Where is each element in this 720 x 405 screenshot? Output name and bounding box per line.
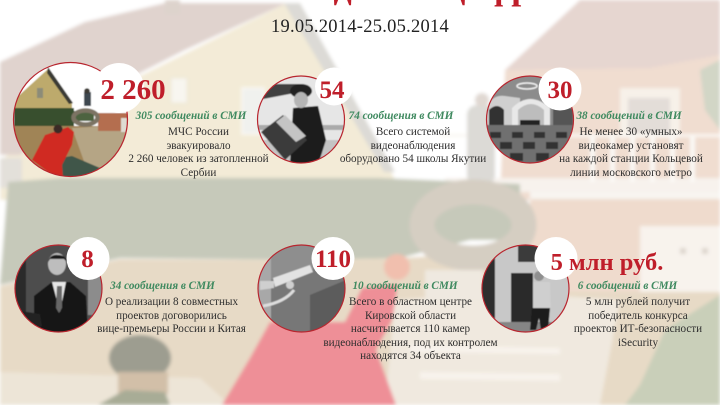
caption: находятся 34 объекта — [360, 350, 461, 362]
lower left wall shade — [0, 158, 22, 188]
left house gable edge — [284, 3, 395, 172]
white crate behind hands — [425, 270, 483, 300]
number badge — [94, 63, 166, 113]
caption: Всего в областном центре — [349, 296, 472, 308]
caption: эвакуировало — [166, 140, 231, 152]
rescuer in red — [222, 284, 398, 405]
caption: МЧС России — [168, 126, 229, 138]
caption: iSecurity — [618, 337, 659, 349]
lower right wall — [530, 200, 720, 292]
caption: видеокамер установят — [578, 140, 684, 152]
photo: security camera — [257, 244, 347, 334]
caption: вице-премьеры России и Китая — [97, 323, 246, 335]
number badge: 110 — [315, 246, 351, 273]
caption: 38 сообщений в СМИ — [575, 110, 682, 122]
number badge: 54 — [320, 77, 345, 104]
item: evacuated people — [13, 62, 269, 179]
balcony rail — [440, 134, 720, 137]
number badge: 30 — [548, 77, 572, 104]
caption: на каждой станции Кольцевой — [559, 153, 703, 165]
fir tree — [625, 295, 720, 405]
caption: О реализации 8 совместных — [105, 296, 238, 308]
caption: победитель конкурса — [588, 310, 688, 322]
doors — [640, 226, 720, 296]
caption — [97, 280, 246, 335]
item: Yakutia schools — [257, 68, 486, 165]
caption: 5 млн рублей получит — [586, 296, 690, 308]
item: Moscow metro — [485, 68, 703, 179]
caption: проектов ИТ-безопасности — [574, 323, 702, 335]
caption: видеонаблюдения, под их контролем — [323, 337, 498, 349]
caption — [323, 280, 498, 362]
photo: metro station — [485, 75, 575, 165]
lifebuoy — [422, 192, 524, 258]
caption: 10 сообщений в СМИ — [352, 280, 458, 292]
right house window — [620, 88, 680, 138]
item: Russia-China projects — [14, 237, 246, 335]
caption: 305 сообщений в СМИ — [135, 110, 247, 122]
figure on balcony — [467, 105, 495, 185]
number badge — [315, 68, 353, 106]
caption: 6 сообщений в СМИ — [578, 280, 678, 292]
caption: видеонаблюдения — [371, 140, 455, 152]
caption: насчитывается 110 камер — [351, 323, 471, 335]
caption — [128, 110, 269, 179]
caption: Не менее 30 «умных» — [580, 126, 682, 138]
soldier — [109, 335, 171, 381]
item: iSecurity contest — [481, 237, 702, 349]
number badge — [534, 237, 663, 280]
caption: 2 260 человек из затопленной — [128, 153, 269, 165]
right house wall — [500, 50, 720, 200]
number badge: 8 — [81, 246, 94, 273]
caption — [340, 110, 486, 165]
photo: vice premier — [14, 244, 104, 334]
caption: Сербии — [181, 167, 216, 179]
water — [0, 250, 720, 405]
caption: линии московского метро — [570, 167, 692, 179]
caption: оборудовано 54 школы Якутии — [340, 153, 486, 165]
chimney — [165, 0, 180, 14]
right house roof — [505, 0, 720, 70]
caption: проектов договорились — [116, 310, 227, 322]
number badge — [538, 68, 582, 110]
left house wall — [0, 4, 398, 200]
photo: man with box — [257, 75, 346, 165]
caption — [559, 110, 703, 179]
caption: 74 сообщения в СМИ — [349, 110, 454, 122]
number badge — [312, 237, 354, 280]
left house windows — [171, 78, 187, 103]
photo: speaker — [481, 244, 571, 336]
caption — [574, 280, 702, 349]
number badge: 5 млн руб. — [551, 249, 663, 276]
caption: Кировской области — [365, 310, 456, 322]
hedge — [0, 178, 520, 285]
number badge — [66, 237, 110, 280]
number badge: 2 260 — [100, 74, 166, 106]
caption: Всего системой — [376, 126, 450, 138]
left house roof — [0, 3, 287, 155]
photo: rescue boat — [13, 62, 128, 178]
item: Kirov cameras — [257, 237, 498, 362]
caption: 34 сообщения в СМИ — [109, 280, 215, 292]
date range: 19.05.2014-25.05.2014 — [271, 17, 449, 37]
